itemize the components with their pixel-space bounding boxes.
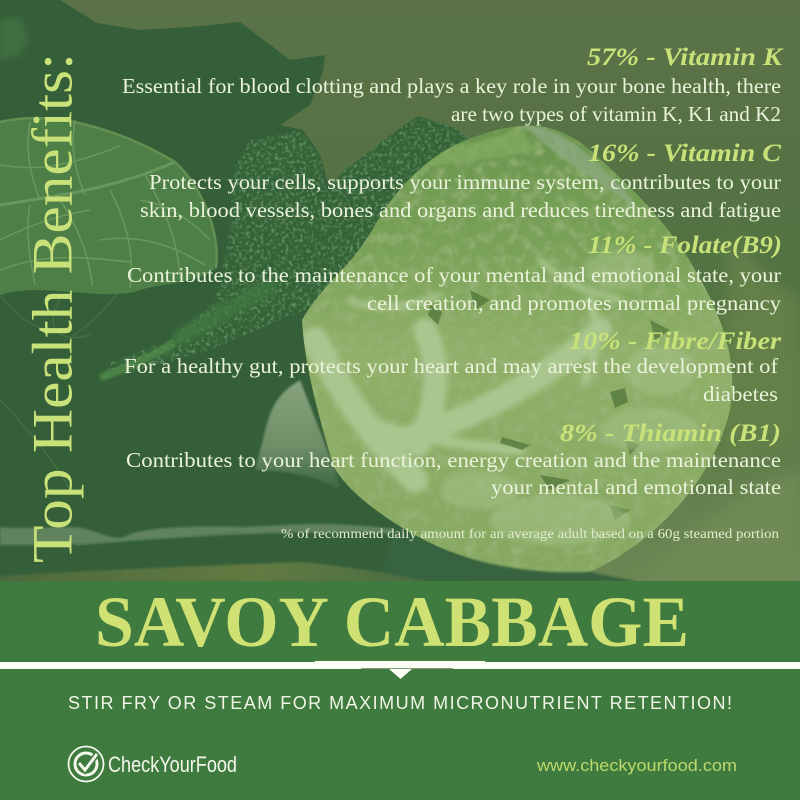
benefit: folate	[127, 232, 782, 315]
benefit: vitamin K: are two types of vitamin K, K1 and K2	[451, 102, 781, 126]
background photo: savoy cabbage	[0, 0, 800, 582]
lower leaf veins	[0, 290, 120, 490]
pale hollow behind cut	[255, 380, 340, 490]
right lower table	[640, 470, 800, 582]
benefit: vitamin C: Protects your cells, supports your immune system, contributes to your	[149, 170, 781, 194]
benefit: vitamin C	[140, 140, 781, 222]
benefits list	[122, 44, 785, 541]
benefit: vitamin C: 16% - Vitamin C	[588, 140, 781, 167]
dark outer leaf	[0, 0, 480, 582]
footnote: % of recommend daily amount for an average adult based on a 60g steamed portion	[281, 526, 779, 541]
benefit: thiamin: Contributes to your heart function, energy creation and the maintenance	[126, 448, 781, 472]
website url: www.checkyourfood.com	[536, 756, 737, 775]
bottom green banner	[0, 581, 800, 800]
top left curly leaf edge	[0, 18, 28, 60]
main title: SAVOY CABBAGE	[95, 582, 689, 662]
benefit: folate: cell creation, and promotes normal pregnancy	[367, 291, 781, 315]
divider with pointer	[0, 661, 800, 679]
benefit: folate: 11% - Folate(B9)	[588, 232, 782, 259]
benefit: fibre: diabetes	[703, 382, 778, 406]
benefit: thiamin: 8% - Thiamin (B1)	[560, 420, 781, 447]
benefit: folate: Contributes to the maintenance of your mental and emotional state, your	[127, 263, 781, 287]
benefit: fibre: 10% - Fibre/Fiber	[569, 328, 781, 355]
vertical heading: Top Health Benefits:	[22, 53, 84, 563]
pale crease on table	[0, 524, 400, 545]
dark shadow under cabbage	[380, 525, 640, 582]
benefit: vitamin K	[122, 44, 785, 126]
benefit: thiamin	[126, 420, 781, 499]
table surface	[0, 562, 430, 582]
logo: CheckYourFood	[68, 746, 237, 782]
benefit: vitamin C: skin, blood vessels, bones and organs and reduces tiredness and fatigue	[140, 198, 781, 222]
benefit: fibre: For a healthy gut, protects your heart and may arrest the development of	[124, 354, 779, 378]
benefit: vitamin K: Essential for blood clotting and plays a key role in your bone health, there	[122, 74, 781, 98]
right edge shading	[720, 230, 800, 470]
benefit: vitamin K: 57% - Vitamin K	[587, 44, 785, 71]
outer leaf highlight	[520, 125, 640, 215]
benefit: thiamin: your mental and emotional state	[491, 475, 781, 499]
benefit: fibre	[124, 328, 781, 406]
tip text: STIR FRY OR STEAM FOR MAXIMUM MICRONUTRIENT RETENTION!	[68, 693, 732, 713]
cut cabbage	[295, 110, 745, 580]
veined left leaf	[0, 118, 217, 295]
frilly leaf texture	[95, 110, 485, 390]
logo: CheckYourFood: CheckYourFood	[108, 752, 237, 777]
